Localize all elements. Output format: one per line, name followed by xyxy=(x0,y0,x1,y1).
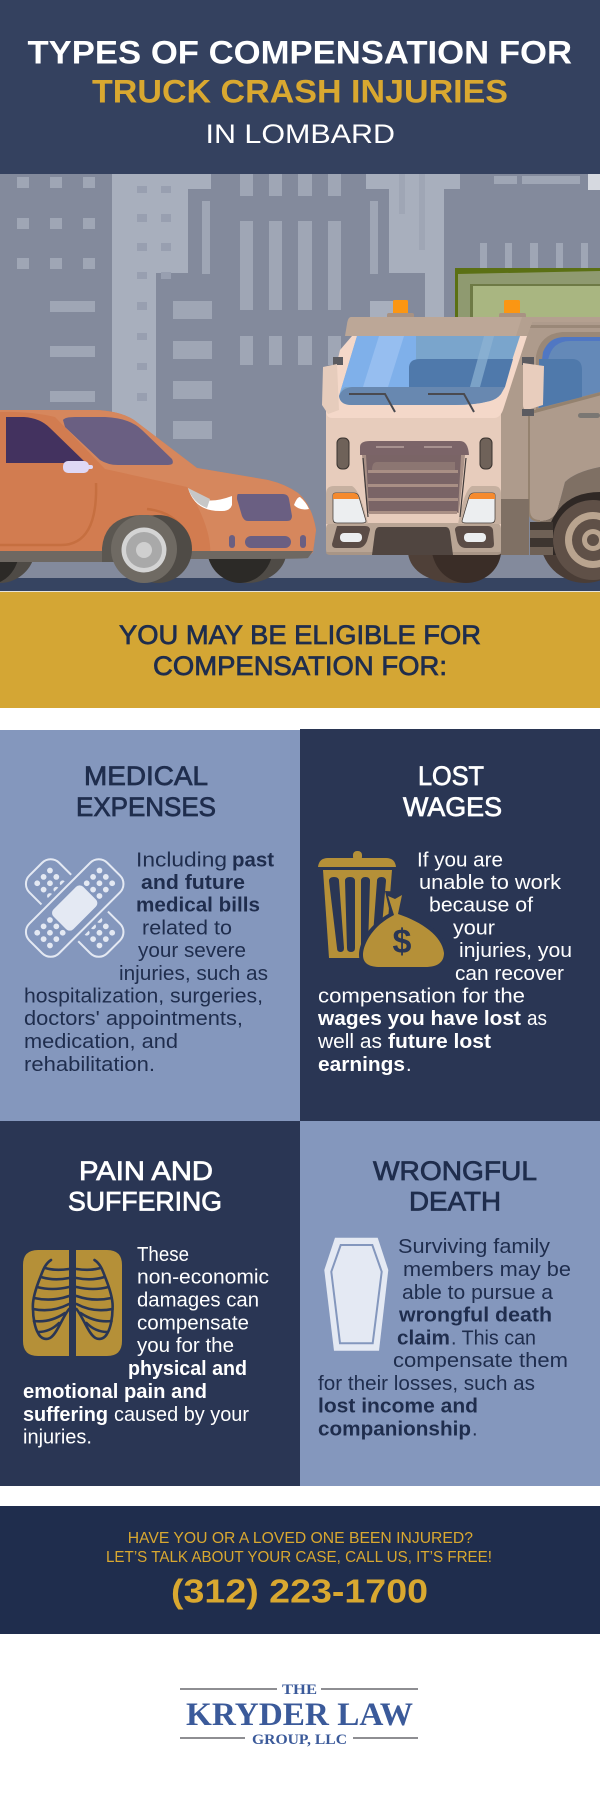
car body xyxy=(0,410,316,557)
logo: The Kryder Law Group: THE xyxy=(282,1682,317,1698)
body text: medical expenses: past xyxy=(232,850,274,872)
grille xyxy=(337,438,492,517)
body text: lost wages: unable to work xyxy=(419,872,562,894)
roof and beacons xyxy=(345,300,600,336)
title line 1: TYPES OF COMPENSATION FOR xyxy=(28,34,572,70)
body text: pain and suffering: compensate xyxy=(137,1313,249,1335)
icon: coffin xyxy=(324,1238,388,1351)
title line 2: TRUCK CRASH INJURIES xyxy=(92,74,508,110)
body text: wrongful death: . xyxy=(472,1418,478,1440)
body text: pain and suffering: physical and xyxy=(128,1358,247,1380)
body text: wrongful death: Surviving family xyxy=(398,1236,550,1258)
heading: lost wages: LOST xyxy=(418,761,484,791)
body text: pain and suffering xyxy=(23,1244,269,1449)
banner heading xyxy=(119,620,481,681)
body text: lost wages: earnings xyxy=(318,1054,405,1076)
car bumper and wheel xyxy=(0,515,313,583)
body text: lost wages: If you are xyxy=(417,850,503,872)
icon: trash can and money bag xyxy=(318,851,448,971)
logo: The Kryder Law Group: KRYDER LAW xyxy=(186,1697,413,1733)
body text: pain and suffering: caused by your xyxy=(114,1404,249,1426)
panel: lost wages xyxy=(300,729,600,1121)
title line 3: IN LOMBARD xyxy=(206,119,395,149)
header panel xyxy=(0,0,600,174)
heading: pain and suffering: SUFFERING xyxy=(68,1187,222,1217)
body text: medical expenses: injuries, such as xyxy=(119,963,268,985)
body text: wrongful death: members may be xyxy=(403,1259,571,1281)
body text: lost wages: well as xyxy=(317,1031,382,1053)
body text: pain and suffering: suffering xyxy=(23,1404,108,1426)
body text: medical expenses: medical bills xyxy=(136,895,260,917)
heading: pain and suffering: PAIN AND xyxy=(79,1156,213,1186)
panel: pain and suffering xyxy=(0,1121,300,1486)
logo: The Kryder Law Group xyxy=(180,1682,418,1748)
body text: medical expenses xyxy=(24,850,274,1076)
call to action panel xyxy=(0,1506,600,1634)
logo: The Kryder Law Group: GROUP, LLC xyxy=(252,1732,347,1748)
body text: medical expenses: doctors' appointments, xyxy=(24,1008,243,1030)
body text: pain and suffering: non-economic xyxy=(137,1267,269,1289)
truck xyxy=(322,268,600,583)
body text: medical expenses: related to xyxy=(142,918,232,940)
body text: wrongful death: . This can xyxy=(451,1327,536,1349)
car windows xyxy=(6,417,173,473)
body text: lost wages xyxy=(317,850,572,1076)
body text: lost wages: future lost xyxy=(388,1031,491,1053)
headlights xyxy=(332,493,495,555)
body text: wrongful death: compensate them xyxy=(393,1350,568,1372)
panel: wrongful death xyxy=(300,1121,600,1486)
cab side and door xyxy=(501,318,600,580)
body text: lost wages: . xyxy=(406,1054,412,1076)
body text: lost wages: your xyxy=(453,918,495,940)
body text: wrongful death: companionship xyxy=(318,1418,471,1440)
heading: lost wages xyxy=(403,761,502,822)
panel: medical expenses xyxy=(0,730,300,1121)
body text: wrongful death: wrongful death xyxy=(398,1305,552,1327)
gold eligibility banner xyxy=(0,592,600,708)
body text: lost wages: as xyxy=(527,1008,547,1030)
car rear wheels xyxy=(0,556,286,583)
body text: pain and suffering: These xyxy=(137,1244,189,1266)
heading: wrongful death: DEATH xyxy=(409,1187,501,1217)
dollar sign: $ xyxy=(393,923,412,961)
heading: medical expenses: EXPENSES xyxy=(76,792,216,822)
body text: wrongful death: for their losses, such as xyxy=(318,1373,535,1395)
windshield xyxy=(339,336,520,412)
body text: lost wages: because of xyxy=(429,895,533,917)
call to action text: HAVE YOU OR A LOVED ONE BEEN INJURED? xyxy=(128,1530,473,1547)
body text: lost wages: can recover xyxy=(455,963,564,985)
heading: medical expenses: MEDICAL xyxy=(84,761,208,791)
phone number: (312) 223-1700 xyxy=(171,1573,428,1610)
cab front xyxy=(326,336,527,555)
body text: medical expenses: medication, and xyxy=(24,1031,178,1053)
car xyxy=(0,410,316,583)
body text: wrongful death: claim xyxy=(397,1327,450,1349)
heading: medical expenses xyxy=(76,761,216,822)
side mirrors xyxy=(322,357,544,416)
car trim lines xyxy=(0,483,186,545)
call to action text: LET’S TALK ABOUT YOUR CASE, CALL US, IT’S FREE! xyxy=(106,1549,492,1566)
body text: lost wages: injuries, you xyxy=(459,940,572,962)
body text: pain and suffering: damages can xyxy=(137,1290,259,1312)
body text: wrongful death: lost income and xyxy=(318,1396,478,1418)
body text: wrongful death xyxy=(318,1236,571,1440)
body text: medical expenses: your severe xyxy=(138,940,246,962)
banner heading: COMPENSATION FOR: xyxy=(153,651,447,681)
city buildings xyxy=(17,174,600,440)
icon: crossed bandages xyxy=(17,851,132,965)
banner heading: YOU MAY BE ELIGIBLE FOR xyxy=(119,620,481,650)
car lights and grille xyxy=(188,488,309,548)
wheels of truck xyxy=(408,493,600,583)
heading: wrongful death xyxy=(373,1156,537,1217)
body text: pain and suffering: you for the xyxy=(137,1335,234,1357)
body text: lost wages: wages you have lost xyxy=(317,1008,521,1030)
body text: wrongful death: able to pursue a xyxy=(402,1282,554,1304)
body text: medical expenses: and future xyxy=(141,872,245,894)
heading: wrongful death: WRONGFUL xyxy=(373,1156,537,1186)
cargo box xyxy=(455,268,600,323)
heading: lost wages: WAGES xyxy=(403,792,502,822)
icon: rib cage xyxy=(23,1250,122,1356)
body text: pain and suffering: emotional pain and xyxy=(23,1381,207,1403)
body text: medical expenses: rehabilitation. xyxy=(24,1054,155,1076)
call to action text xyxy=(106,1530,492,1566)
body text: pain and suffering: injuries. xyxy=(23,1427,92,1449)
body text: medical expenses: Including xyxy=(136,850,227,872)
body text: medical expenses: hospitalization, surgeries, xyxy=(24,986,263,1008)
body text: lost wages: compensation for the xyxy=(318,986,525,1008)
illustration: truck and car on city street xyxy=(0,174,600,592)
heading: pain and suffering xyxy=(68,1156,222,1217)
